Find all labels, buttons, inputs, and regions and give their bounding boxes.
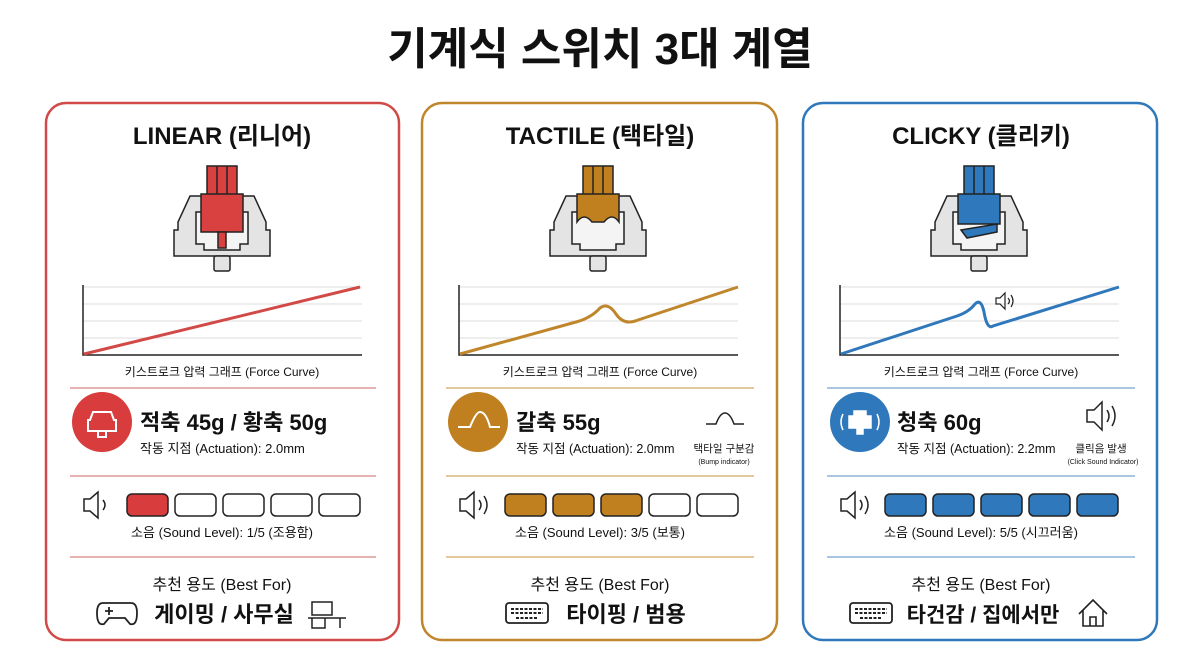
heading: linear: LINEAR (리니어)	[133, 123, 311, 150]
text: weight: 작동 지점 (Actuation): 2.2mm	[897, 442, 1056, 456]
text: weight: 작동 지점 (Actuation): 2.0mm	[516, 442, 675, 456]
chart: clicky force curve: 키스트로크 압력 그래프 (Force Curve)	[884, 365, 1078, 379]
sound meter: 소음 (Sound Level): 5/5 (시끄러움)	[884, 525, 1078, 540]
text: weight: 청축 60g	[897, 410, 982, 435]
best for: clicky: 타건감 / 집에서만	[907, 604, 1059, 627]
icon: red switch	[174, 166, 270, 271]
title: 기계식 스위치 3대 계열	[387, 25, 813, 74]
chart: clicky force curve	[840, 285, 1119, 379]
best for: linear: 게이밍 / 사무실	[154, 602, 294, 627]
click sound indicator: (Click Sound Indicator)	[1068, 459, 1138, 466]
click sound indicator	[1068, 402, 1138, 466]
icon: blue switch	[931, 166, 1027, 271]
sound meter: 소음 (Sound Level): 1/5 (조용함)	[131, 525, 313, 540]
text: weight	[897, 410, 1056, 456]
sound meter	[84, 492, 360, 540]
text: weight	[516, 410, 675, 456]
sound meter: 소음 (Sound Level): 3/5 (보통)	[515, 525, 685, 540]
bump indicator	[694, 413, 755, 466]
panel: linear	[46, 103, 399, 640]
text: weight: 갈축 55g	[516, 410, 601, 435]
panel: clicky	[803, 103, 1157, 640]
chart: linear force curve	[83, 285, 362, 379]
sound meter	[841, 492, 1118, 540]
text: weight: 적축 45g / 황축 50g	[140, 410, 327, 435]
best for: clicky	[850, 576, 1107, 627]
text: weight	[140, 410, 327, 456]
panel: tactile	[422, 103, 777, 640]
chart: tactile force curve	[459, 285, 738, 379]
bump indicator: (Bump indicator)	[698, 459, 750, 466]
icon: red circle	[72, 392, 132, 452]
click sound indicator: 클릭음 발생	[1075, 443, 1127, 455]
heading: tactile: TACTILE (택타일)	[506, 123, 694, 150]
best for: tactile	[506, 576, 686, 627]
icon: blue circle	[830, 392, 890, 452]
best for: tactile: 타이핑 / 범용	[566, 602, 686, 627]
sound meter	[460, 492, 738, 540]
best for: linear: 추천 용도 (Best For)	[153, 576, 291, 594]
icon: brown circle	[448, 392, 508, 452]
best for: tactile: 추천 용도 (Best For)	[531, 576, 669, 594]
icon: brown switch	[550, 166, 646, 271]
text: weight: 작동 지점 (Actuation): 2.0mm	[140, 441, 305, 456]
chart: tactile force curve: 키스트로크 압력 그래프 (Force Curve)	[503, 365, 697, 379]
chart: linear force curve: 키스트로크 압력 그래프 (Force Curve)	[125, 365, 319, 379]
best for: linear	[97, 576, 346, 628]
best for: clicky: 추천 용도 (Best For)	[912, 576, 1050, 594]
bump indicator: 택타일 구분감	[694, 442, 755, 455]
heading: clicky: CLICKY (클리키)	[892, 123, 1070, 150]
